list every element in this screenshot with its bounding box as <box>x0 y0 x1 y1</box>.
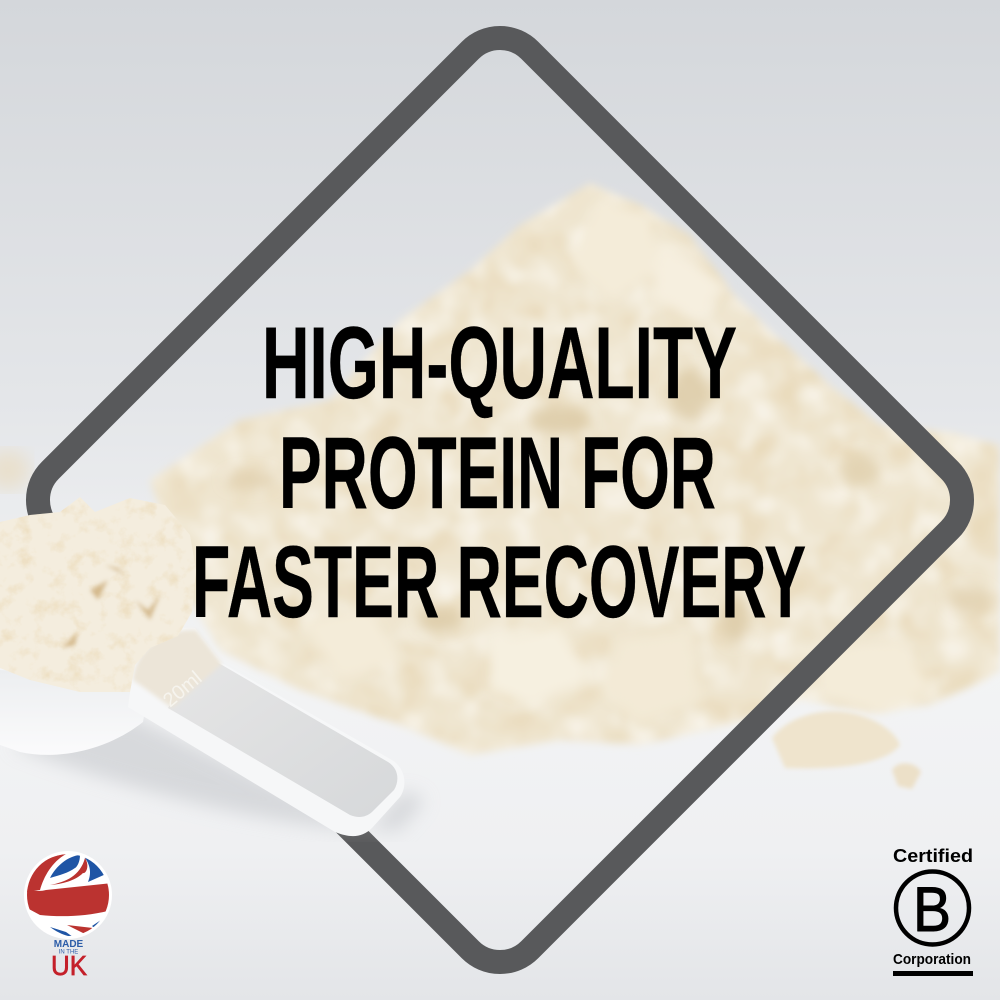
measuring scoop <box>0 497 425 836</box>
headline line 1: HIGH-QUALITY <box>262 306 737 420</box>
scoop bowl <box>0 670 150 755</box>
embossed handle marking: 20ml <box>159 667 206 712</box>
fallen powder clump <box>772 711 900 768</box>
pile chunks <box>224 200 992 725</box>
blurred powder pile <box>0 183 1000 789</box>
logo text: certified: Certified <box>893 845 973 866</box>
badge text: made in the: MADE <box>54 939 84 950</box>
made in the UK badge <box>24 851 112 981</box>
headline <box>192 306 806 639</box>
scoop shadow <box>10 715 425 830</box>
logo text: corporation: Corporation <box>893 951 971 968</box>
badge text: UK: UK <box>51 950 87 981</box>
certified B corporation logo <box>893 845 973 976</box>
small powder crumb <box>892 763 921 789</box>
logo mark: circled B: B <box>913 875 951 945</box>
icon: union flag globe <box>24 851 112 939</box>
logo underline bar <box>893 971 973 976</box>
scoop powder <box>0 497 196 692</box>
headline line 2: PROTEIN FOR <box>279 416 716 530</box>
made in the UK badge: IN THE <box>59 950 78 956</box>
powder crevices <box>62 565 160 648</box>
scoop handle <box>128 628 404 836</box>
